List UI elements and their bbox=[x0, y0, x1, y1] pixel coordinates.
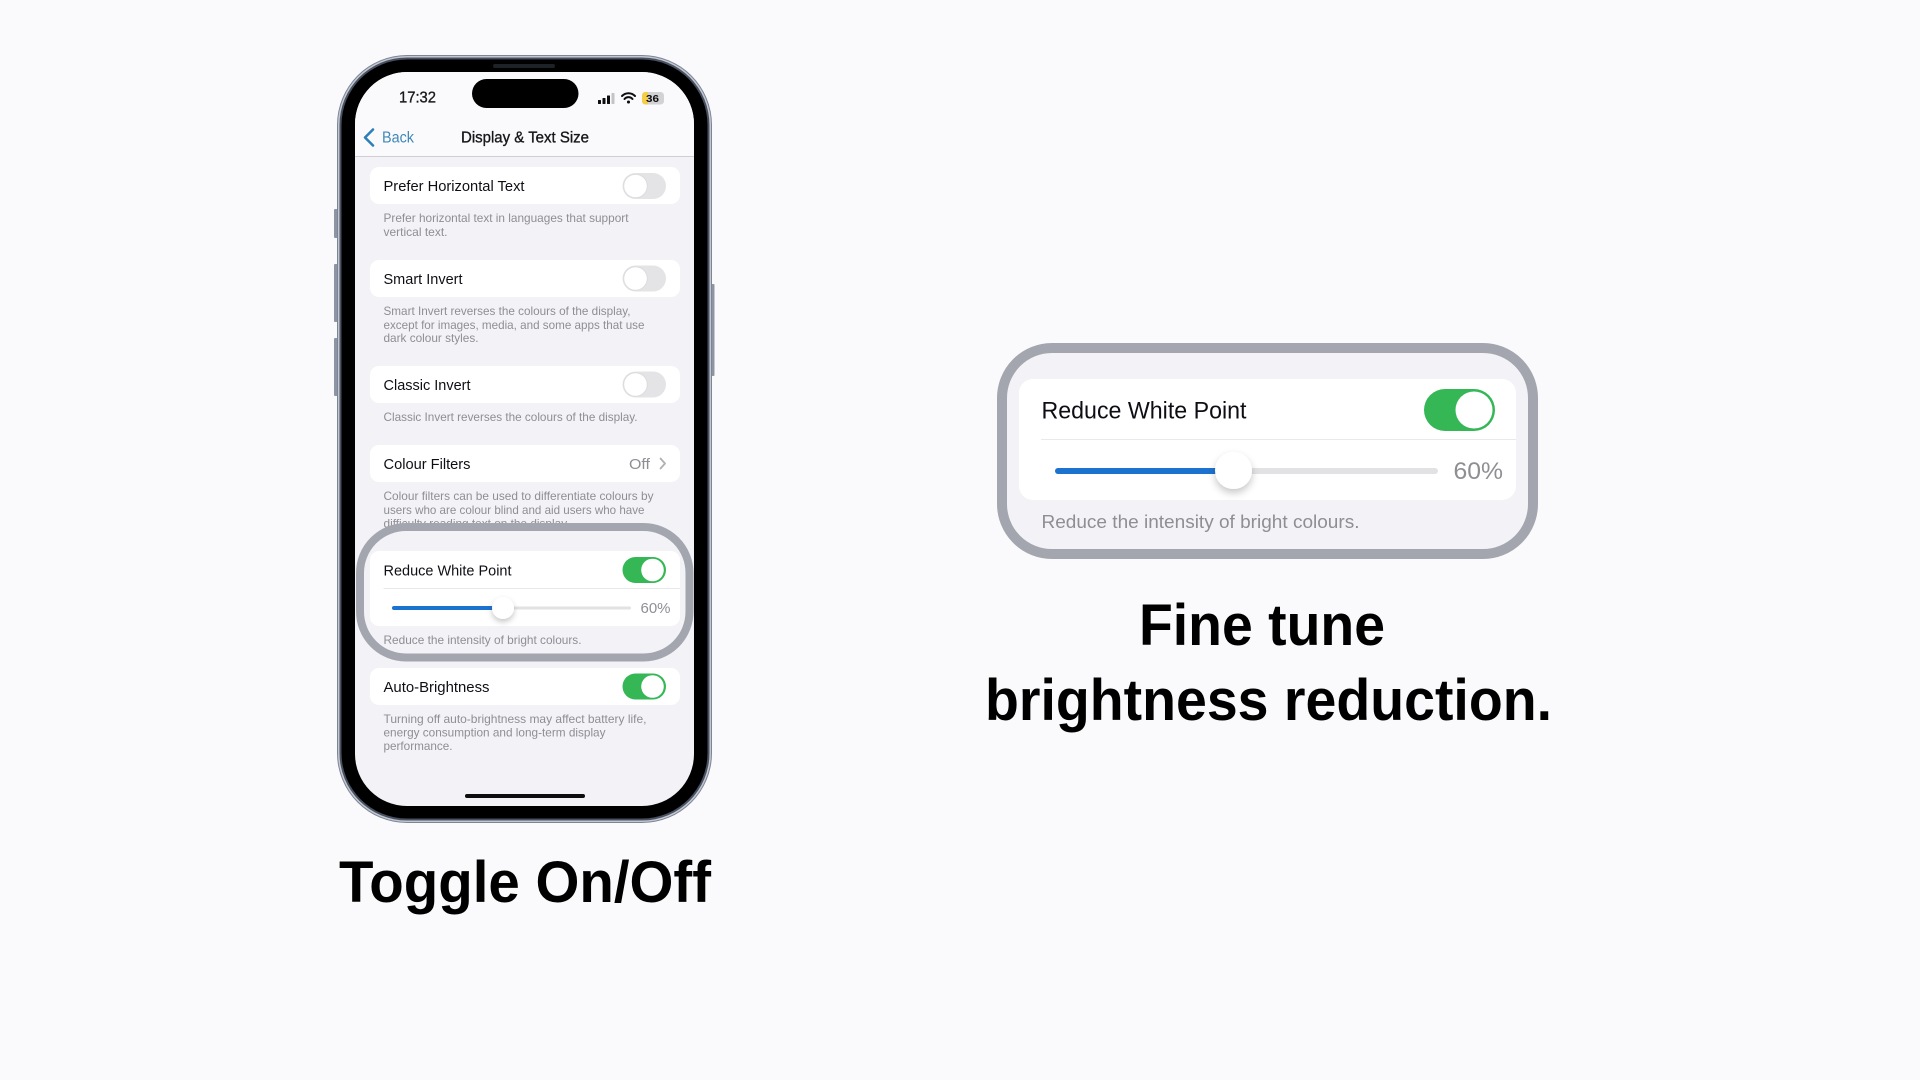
setting: Prefer Horizontal Text: Prefer Horizontal Text bbox=[384, 178, 525, 195]
setting: Smart Invert: dark colour styles. bbox=[384, 331, 478, 345]
icon: battery: 36 bbox=[646, 93, 659, 105]
heading: Fine tune brightness reduction. bbox=[985, 593, 1552, 733]
icon: battery bbox=[642, 92, 664, 105]
setting: Classic Invert: Classic Invert reverses the colours of the display. bbox=[384, 410, 638, 424]
setting: Reduce White Point with highlight ring: Reduce White Point bbox=[384, 562, 512, 580]
home indicator bbox=[465, 794, 585, 798]
icon: phone side buttons bbox=[334, 209, 714, 396]
setting: Colour Filters: users who are colour blind and aid users who have bbox=[384, 503, 645, 517]
icon: back chevron bbox=[365, 130, 373, 146]
setting: Reduce White Point with highlight ring bbox=[360, 527, 690, 658]
navigation bar bbox=[355, 72, 694, 157]
dynamic island bbox=[472, 79, 578, 108]
phone body bbox=[337, 55, 712, 823]
setting: Colour Filters bbox=[370, 445, 680, 530]
icon: signal bars bbox=[598, 93, 614, 104]
status time: 17:32 bbox=[399, 90, 436, 106]
infographic canvas bbox=[334, 55, 1548, 914]
setting: Prefer Horizontal Text: Prefer horizontal text in languages that support bbox=[384, 211, 629, 225]
heading: Fine tune brightness reduction.: Fine tune bbox=[1139, 593, 1385, 658]
description: Reduce the intensity of bright colours. bbox=[1042, 511, 1360, 532]
label: Reduce White Point: Reduce White Point bbox=[1042, 398, 1247, 424]
heading: Fine tune brightness reduction.: brightness reduction. bbox=[985, 668, 1552, 733]
setting: Colour Filters: Colour Filters bbox=[384, 456, 470, 473]
setting: Reduce White Point with highlight ring: 60% bbox=[640, 601, 671, 617]
highlight ring bbox=[360, 527, 690, 658]
setting: Auto-Brightness: energy consumption and long-term display bbox=[384, 726, 606, 740]
setting: Smart Invert: except for images, media, and some apps that use bbox=[384, 318, 645, 332]
setting: Classic Invert: Classic Invert bbox=[384, 377, 471, 394]
setting: Prefer Horizontal Text: vertical text. bbox=[384, 225, 448, 239]
setting: Classic Invert bbox=[370, 366, 680, 424]
setting: Smart Invert: Smart Invert reverses the colours of the display, bbox=[384, 304, 630, 318]
value: 60%: 60% bbox=[1454, 458, 1503, 485]
setting: Auto-Brightness: Turning off auto-brightness may affect battery life, bbox=[384, 712, 646, 726]
setting: Auto-Brightness bbox=[370, 668, 680, 753]
icon: wifi bbox=[622, 93, 635, 103]
phone screen bbox=[355, 72, 694, 806]
divider label bbox=[1041, 439, 1516, 440]
setting: Auto-Brightness: performance. bbox=[384, 739, 452, 753]
setting: Reduce White Point with highlight ring: Reduce the intensity of bright colours. bbox=[384, 633, 582, 647]
setting: Smart Invert: Smart Invert bbox=[384, 271, 463, 288]
setting: Smart Invert bbox=[370, 260, 680, 345]
toggle: on bbox=[1424, 389, 1495, 431]
screen title: Display & Text Size bbox=[461, 130, 589, 146]
panel: zoomed Reduce White Point detail bbox=[1002, 348, 1533, 554]
settings card bbox=[1019, 379, 1516, 500]
slider at 60% bbox=[1055, 452, 1438, 489]
setting: Prefer Horizontal Text bbox=[370, 167, 680, 239]
zoom ring bbox=[1002, 348, 1533, 554]
heading: Toggle On/Off: Toggle On/Off bbox=[339, 850, 712, 915]
back label: Back bbox=[382, 130, 414, 146]
panel: iPhone mockup bbox=[334, 55, 714, 823]
setting: Colour Filters: difficulty reading text on the display. bbox=[384, 516, 570, 530]
setting: Colour Filters: Colour filters can be used to differentiate colours by bbox=[384, 489, 654, 503]
setting: Auto-Brightness: Auto-Brightness bbox=[384, 679, 490, 696]
setting: Colour Filters: Off bbox=[629, 457, 651, 473]
